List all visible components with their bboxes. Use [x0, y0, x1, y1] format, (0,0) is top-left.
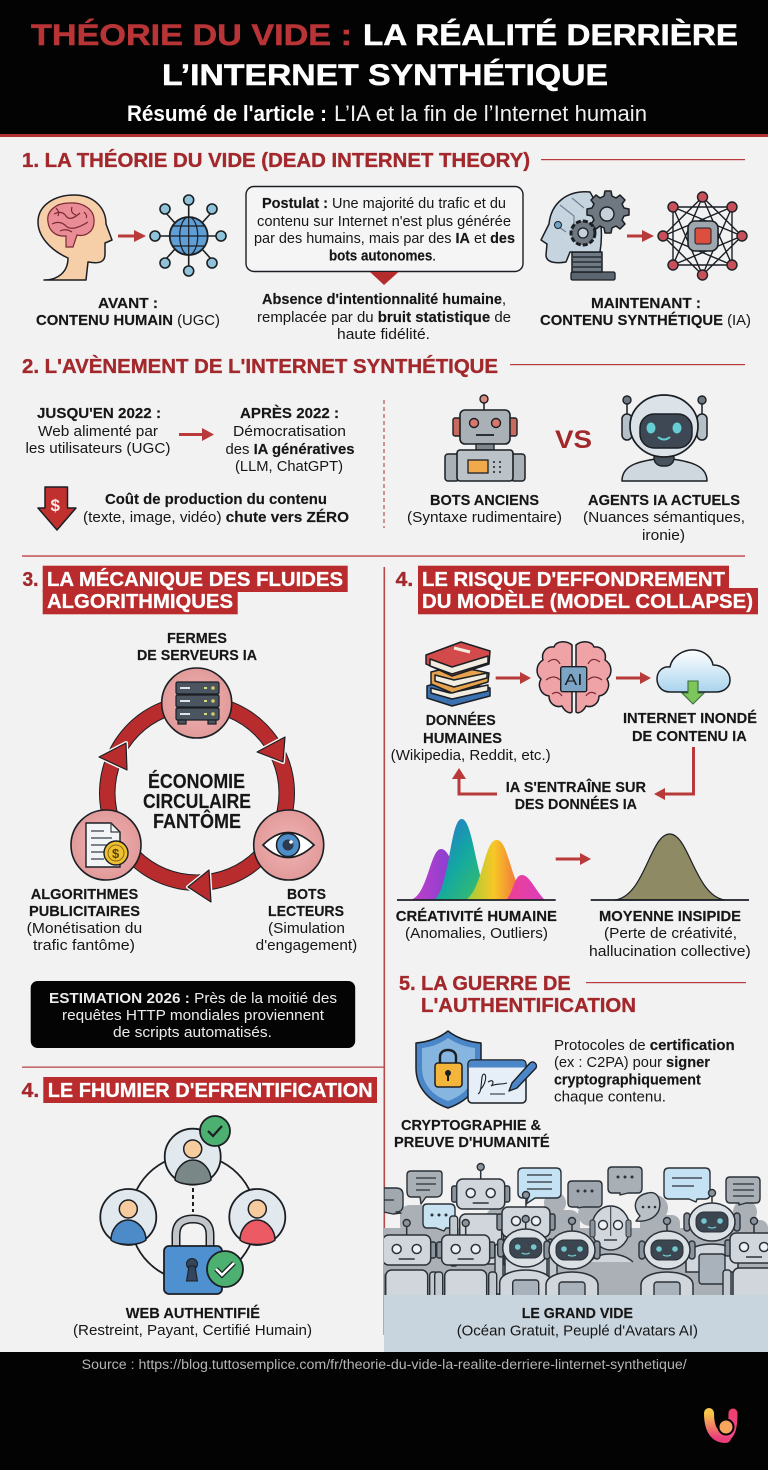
text: économie circulaire fantôme: [143, 770, 251, 833]
label: maintenant: [540, 295, 751, 329]
icon: globe network: [150, 195, 226, 276]
heading: section 3: LA MÉCANIQUE DES FLUIDES: [47, 568, 343, 591]
text: absence d'intentionnalité: [257, 291, 511, 343]
label: bots anciens: [407, 492, 562, 526]
text: absence d'intentionnalité: haute fidélité.: [337, 326, 430, 343]
text: après 2022: des IA génératives: [226, 441, 354, 458]
heading: garbled section 4 left: 4.: [22, 1080, 39, 1102]
arrow: [496, 672, 531, 684]
arrow: [556, 853, 591, 865]
heading: section 4 right: DU MODÈLE (MODEL COLLAPSE): [422, 590, 753, 613]
label: algorithmes publicitaires: ALGORITHMES: [31, 886, 138, 903]
label: web authentifié: [73, 1305, 312, 1339]
label: internet inondé: [623, 710, 757, 745]
heading: section 4 right: 4.: [396, 569, 413, 591]
label: avant: AVANT :: [98, 295, 158, 312]
node: ad document: [71, 810, 141, 880]
label: fermes de serveurs: DE SERVEURS IA: [137, 647, 257, 664]
text: IA s'entraîne: DES DONNÉES IA: [515, 796, 637, 813]
heading: section 3: [22, 566, 348, 614]
callout: postulat: Postulat : Une majorité du trafic et du: [262, 195, 506, 212]
icon: cloud download: [657, 650, 730, 704]
label: cryptographie: CRYPTOGRAPHIE &: [401, 1117, 541, 1134]
title: LA RÉALITÉ DERRIÈRE: [363, 18, 738, 52]
title: L’INTERNET SYNTHÉTIQUE: [162, 58, 608, 92]
chart: human creativity distribution: [397, 819, 556, 900]
source text: Source : https://blog.tuttosemplice.com/fr/theorie-du-vide-la-realite-derriere-linternet-synthetique/: [82, 1357, 687, 1372]
text: coût de production: [83, 491, 349, 526]
subtitle: L’IA et la fin de l’Internet humain: [334, 101, 647, 126]
text: protocoles: cryptographiquement: [554, 1071, 701, 1088]
label: cryptographie: [394, 1117, 550, 1151]
heading: section 2: 2. L'AVÈNEMENT DE L'INTERNET SYNTHÉTIQUE: [22, 355, 498, 378]
label: avant: [36, 295, 220, 329]
label: cryptographie: PREUVE D'HUMANITÉ: [394, 1134, 550, 1151]
icon: AI network: [658, 192, 747, 280]
text: jusqu'en 2022: les utilisateurs (UGC): [26, 440, 171, 457]
label: agents IA actuels: AGENTS IA ACTUELS: [588, 492, 740, 509]
heading: section 4 right: [396, 566, 758, 614]
speech bubbles: [384, 1167, 760, 1231]
text: économie circulaire fantôme: ÉCONOMIE: [148, 770, 245, 793]
label: données humaines: (Wikipedia, Reddit, etc.): [391, 747, 551, 764]
user left: [100, 1189, 156, 1245]
arrowheads: [99, 737, 285, 902]
heading: section 5: L'AUTHENTIFICATION: [421, 995, 636, 1017]
label: agents IA actuels: [583, 492, 745, 544]
VS label: VS: [555, 426, 592, 454]
label: moyenne insipide: (Perte de créativité,: [604, 925, 737, 942]
text: jusqu'en 2022: JUSQU'EN 2022 :: [37, 405, 161, 422]
heading: section 5: [399, 973, 746, 1017]
text: après 2022: APRÈS 2022 :: [240, 405, 339, 422]
icon: authenticated users network: [100, 1116, 285, 1294]
label: moyenne insipide: MOYENNE INSIPIDE: [599, 908, 741, 925]
label: créativité humaine: (Anomalies, Outliers): [405, 925, 548, 942]
arrow: elbow right: [654, 747, 695, 800]
callout: estimation 2026: de scripts automatisés.: [113, 1024, 272, 1041]
header band: [0, 0, 768, 137]
heading: section 3: ALGORITHMIQUES: [47, 591, 233, 613]
title: THÉORIE DU VIDE :: [31, 18, 352, 52]
illustration: crowd of robots: [384, 1162, 768, 1295]
text: coût de production: Coût de production du contenu: [105, 491, 327, 508]
label: données humaines: HUMAINES: [423, 730, 502, 747]
heading: section 4 right: LE RISQUE D'EFFONDREMENT: [422, 569, 725, 591]
text: absence d'intentionnalité: remplacée par du bruit statistique de: [257, 309, 511, 326]
callout: postulat: [246, 186, 523, 285]
label: agents IA actuels: ironie): [642, 527, 685, 544]
label: bots lecteurs: LECTEURS: [268, 903, 344, 920]
arrow: elbow left: [452, 768, 497, 796]
label: bots anciens: BOTS ANCIENS: [430, 492, 539, 509]
label: internet inondé: INTERNET INONDÉ: [623, 710, 757, 727]
label: bots lecteurs: d'engagement): [256, 937, 357, 954]
label: moyenne insipide: hallucination collective): [589, 943, 751, 960]
heading: garbled section 4 left: LE FHUMIER D'EFRENTIFICATION: [48, 1080, 373, 1102]
text: IA s'entraîne: [506, 778, 646, 813]
callout: postulat: contenu sur Internet n'est plus générée: [257, 213, 511, 230]
label: bots lecteurs: (Simulation: [268, 920, 345, 937]
node: ad document: $: [112, 846, 120, 861]
label: données humaines: DONNÉES: [426, 712, 496, 729]
user right: [229, 1189, 285, 1245]
icon: AI brain: [537, 642, 611, 713]
label: web authentifié: (Restreint, Payant, Certifié Humain): [73, 1322, 312, 1339]
callout: estimation 2026: [31, 981, 355, 1048]
arrow: [179, 428, 214, 441]
label: bots lecteurs: BOTS: [287, 886, 326, 903]
label: internet inondé: DE CONTENU IA: [632, 728, 747, 745]
heading: section 5: 5. LA GUERRE DE: [399, 973, 571, 995]
label: agents IA actuels: (Nuances sémantiques,: [583, 509, 745, 526]
logo: [709, 1413, 734, 1438]
back robots: [450, 1164, 512, 1266]
text: protocoles: [554, 1037, 735, 1106]
subtitle: Résumé de l'article :: [127, 101, 327, 126]
heading: section 1: 1. LA THÉORIE DU VIDE (DEAD INTERNET THEORY): [22, 149, 530, 172]
band: le grand vide: [384, 1295, 768, 1352]
text: protocoles: chaque contenu.: [554, 1089, 666, 1106]
label: moyenne insipide: [589, 908, 751, 960]
label: algorithmes publicitaires: (Monétisation du: [27, 920, 142, 937]
icon: old robot: [445, 395, 525, 481]
subtitle: [127, 101, 647, 126]
callout: postulat: bots autonomes.: [329, 248, 436, 264]
text: après 2022: [226, 405, 354, 475]
text: après 2022: (LLM, ChatGPT): [235, 458, 343, 475]
padlock: [164, 1219, 222, 1294]
label: créativité humaine: [396, 908, 557, 942]
icon: AI brain: AI: [564, 672, 582, 689]
text: jusqu'en 2022: Web alimenté par: [38, 423, 158, 440]
label: fermes de serveurs: FERMES: [167, 630, 227, 647]
user top: [165, 1129, 221, 1185]
callout: estimation 2026: requêtes HTTP mondiales proviennent: [62, 1007, 325, 1024]
callout: postulat: par des humains, mais par des IA et des: [254, 230, 515, 247]
title: [31, 18, 738, 92]
icon: robot head with gears: [541, 191, 629, 280]
text: IA s'entraîne: IA S'ENTRAÎNE SUR: [506, 778, 646, 796]
label: algorithmes publicitaires: [27, 886, 142, 954]
text: absence d'intentionnalité: Absence d'intentionnalité humaine,: [262, 291, 506, 308]
text: après 2022: Démocratisation: [233, 423, 346, 440]
band: le grand vide: LE GRAND VIDE: [522, 1305, 633, 1322]
callout: estimation 2026: ESTIMATION 2026 : Près de la moitié des: [49, 990, 337, 1007]
label: créativité humaine: CRÉATIVITÉ HUMAINE: [396, 908, 557, 925]
arrow: [118, 230, 146, 242]
icon: human head with brain: [38, 195, 112, 280]
label: algorithmes publicitaires: trafic fantôme): [33, 937, 135, 954]
label: données humaines: [391, 712, 551, 764]
icon: dollar down arrow: $: [50, 496, 60, 515]
diagram: circular economy: [71, 668, 324, 902]
label: bots anciens: (Syntaxe rudimentaire): [407, 509, 562, 526]
arrow: [627, 230, 654, 242]
check badge top: [200, 1116, 230, 1146]
arrow: [616, 672, 651, 684]
label: fermes de serveurs: [137, 630, 257, 664]
text: protocoles: (ex : C2PA) pour signer: [554, 1054, 710, 1071]
label: algorithmes publicitaires: PUBLICITAIRES: [29, 903, 140, 920]
text: économie circulaire fantôme: FANTÔME: [153, 809, 241, 833]
footer band: [0, 1352, 768, 1470]
check badge lock: [207, 1251, 243, 1287]
icon: dollar down arrow: [38, 487, 76, 530]
text: protocoles: Protocoles de certification: [554, 1037, 735, 1054]
label: avant: CONTENU HUMAIN (UGC): [36, 312, 220, 329]
label: bots lecteurs: [256, 886, 357, 954]
text: coût de production: (texte, image, vidéo) chute vers ZÉRO: [83, 509, 349, 526]
text: jusqu'en 2022: [26, 405, 171, 457]
front robots: [384, 1218, 436, 1295]
band: le grand vide: (Océan Gratuit, Peuplé d'Avatars AI): [457, 1323, 698, 1340]
icon: modern AI robot: [622, 395, 707, 481]
label: maintenant: CONTENU SYNTHÉTIQUE (IA): [540, 312, 751, 329]
chart: flat bell curve: [591, 834, 749, 900]
node: eye: [254, 810, 324, 880]
label: maintenant: MAINTENANT :: [591, 295, 701, 312]
silhouettes: [384, 1192, 768, 1295]
node: servers: [162, 668, 232, 738]
heading: section 3: 3.: [22, 569, 38, 591]
label: web authentifié: WEB AUTHENTIFIÉ: [126, 1305, 260, 1322]
text: économie circulaire fantôme: CIRCULAIRE: [143, 791, 251, 813]
icon: shield, lock and signature: [416, 1031, 536, 1108]
icon: books: [426, 642, 490, 706]
